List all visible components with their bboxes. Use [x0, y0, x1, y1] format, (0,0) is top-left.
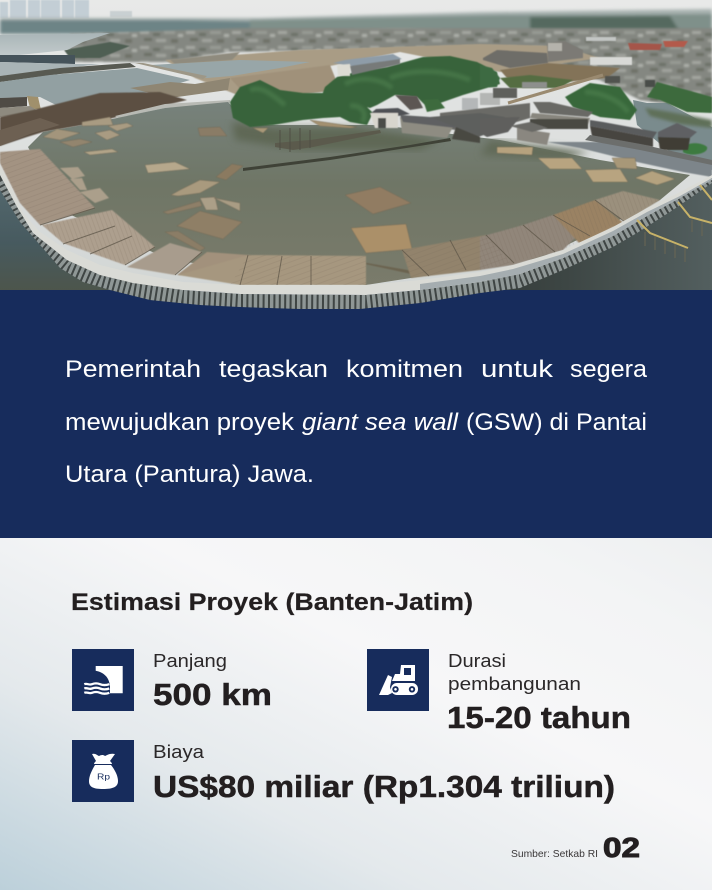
stat: length — [72, 649, 272, 712]
label: construction duration — [448, 650, 581, 694]
waterfront houses — [370, 95, 697, 150]
pier walkways — [275, 130, 381, 150]
intro text block: giant sea wall — [302, 409, 459, 436]
value: 15-20 tahun: 15-20 tahun — [447, 700, 631, 735]
sand flats — [165, 44, 620, 100]
label: cost: Biaya — [153, 741, 205, 762]
intro text block — [65, 356, 647, 488]
warehouse on shore — [333, 37, 688, 110]
grey shore fence — [547, 142, 712, 177]
icon: money bag — [72, 740, 134, 802]
brown bank — [0, 92, 187, 146]
page number: 02 — [603, 832, 640, 863]
mangrove trees — [230, 56, 712, 154]
left lagoons — [0, 33, 110, 57]
far skyline and haze — [0, 0, 132, 18]
right water — [633, 100, 712, 170]
intro text block: tegaskan — [219, 356, 328, 383]
heading: project estimate: Estimasi Proyek (Banten-Jatim) — [71, 589, 473, 616]
bamboo deck — [0, 149, 660, 285]
pond — [28, 102, 690, 285]
intro text block: (GSW) di Pantai — [466, 409, 647, 436]
label: construction duration: Durasi — [448, 650, 506, 671]
source note: Sumber: Setkab RI — [511, 848, 598, 860]
distant grey buildings — [483, 50, 548, 68]
far town — [70, 28, 712, 110]
intro text block: untuk — [481, 356, 554, 383]
intro text block: komitmen — [346, 356, 463, 383]
intro text block: Utara (Pantura) Jawa. — [65, 461, 314, 488]
intro text block: Pemerintah — [65, 356, 201, 383]
photo: aerial view of sea wall and pond — [0, 0, 712, 315]
value: cost: US$80 miliar (Rp1.304 triliun) — [153, 769, 615, 804]
stat: cost — [72, 740, 615, 804]
value: 500 km: 500 km — [153, 677, 272, 712]
intro text block: mewujudkan proyek — [65, 409, 295, 436]
stat: duration — [367, 649, 631, 735]
intro text block: segera — [570, 356, 647, 383]
navy text panel — [0, 290, 712, 538]
label: construction duration: pembangunan — [448, 673, 581, 694]
sea beyond the wall — [0, 175, 110, 290]
label: length: Panjang — [153, 650, 227, 671]
icon: sea wall and waves — [72, 649, 134, 711]
background panel: estimate section — [0, 538, 712, 890]
icon: money bag: Rp — [97, 772, 111, 782]
floating bamboo mats — [43, 117, 675, 274]
causeway spoil and shore debris — [0, 97, 27, 108]
icon: bulldozer — [367, 649, 429, 711]
stilt scaffolds right — [637, 185, 712, 262]
